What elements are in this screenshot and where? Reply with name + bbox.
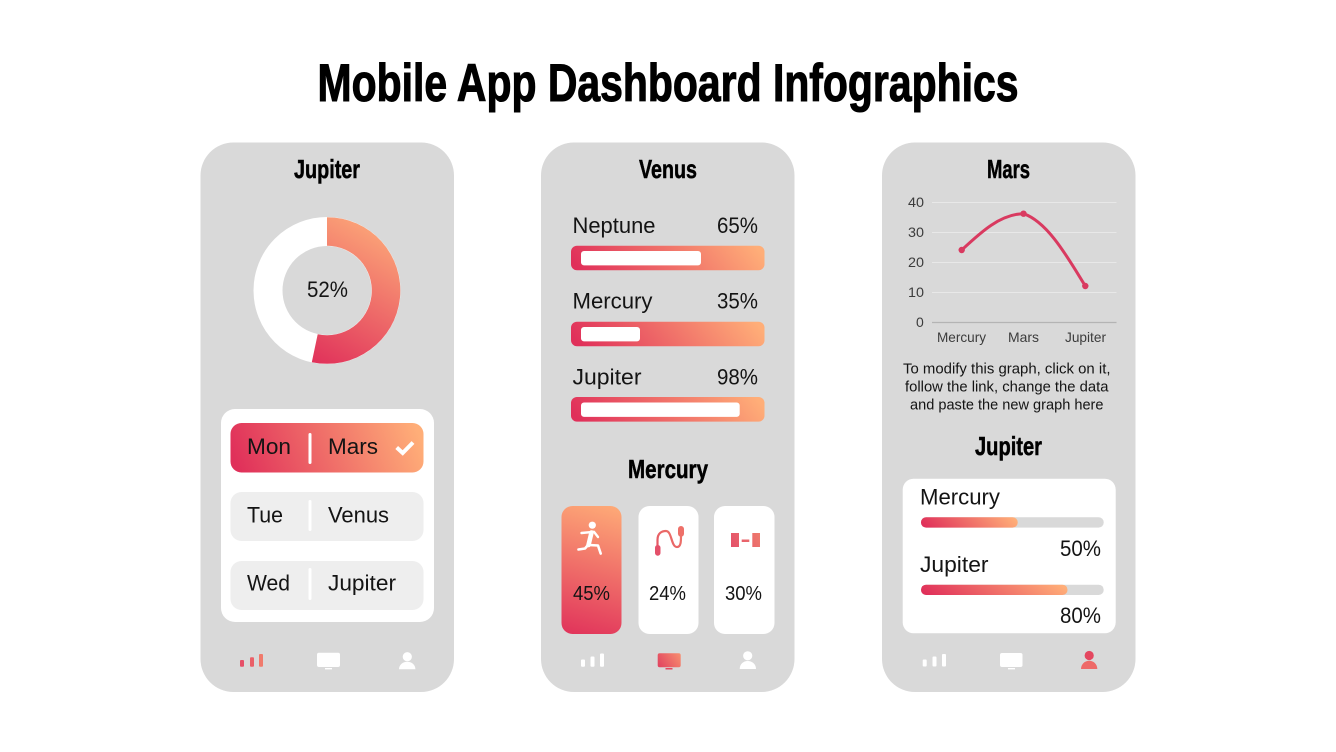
heading: Venus: Venus: [639, 154, 697, 184]
panel: Mars phone: [882, 142, 1136, 692]
icon: runner: [578, 522, 601, 554]
progress: Neptune 65%: Neptune: [572, 213, 656, 238]
heading: Jupiter: Jupiter: [294, 154, 360, 184]
heading: Mercury: Mercury: [628, 454, 708, 484]
row: Tue Venus: Tue: [247, 502, 283, 528]
progress: Mercury 50%: Mercury: [920, 484, 1001, 510]
chart note: To modify this graph, click on it,: [903, 362, 1110, 378]
line chart: Jupiter: [1065, 329, 1106, 345]
icon: dumbbell: [731, 533, 760, 547]
row: Mon Mars selected: Mon: [247, 434, 291, 459]
heading: Mars: Mars: [987, 154, 1030, 184]
schedule card: [221, 409, 434, 622]
icon: jump rope: [655, 526, 684, 556]
chart note: [903, 362, 1110, 414]
line chart: 20: [908, 254, 924, 270]
line chart: 40: [908, 194, 924, 210]
donut chart: 52%: [268, 217, 400, 364]
progress: Mercury 50%: 50%: [1060, 536, 1101, 561]
icon: monitor active: [658, 653, 681, 670]
row: Tue Venus: Venus: [328, 502, 389, 528]
line chart: 10: [908, 284, 924, 300]
icon: bars active: [240, 654, 263, 667]
icon: bars: [923, 654, 946, 666]
donut chart: 52%: 52%: [307, 277, 348, 302]
stat card: run 45%: [562, 506, 622, 634]
progress: Jupiter 80%: [920, 552, 1104, 628]
progress: Jupiter 80%: Jupiter: [920, 552, 989, 577]
row: Mon Mars selected: Mars: [328, 434, 378, 459]
progress card: [903, 479, 1116, 633]
chart note: and paste the new graph here: [910, 398, 1104, 414]
row: Wed Jupiter: [230, 561, 424, 610]
row: Wed Jupiter: Wed: [247, 570, 290, 596]
stat card: rope 24%: [638, 506, 698, 634]
panel: Venus phone: [541, 142, 794, 692]
icon: person: [740, 651, 756, 669]
icon: person active: [1081, 651, 1097, 669]
progress: Neptune 65%: [571, 213, 764, 270]
progress: Mercury 50%: [920, 484, 1104, 561]
progress: Jupiter 98%: [571, 364, 764, 422]
stat card: run 45%: 45%: [573, 583, 610, 605]
progress: Mercury 35%: 35%: [717, 288, 758, 314]
icon: monitor: [317, 653, 340, 669]
row: Mon Mars selected: [230, 423, 424, 472]
progress: Jupiter 98%: 98%: [717, 364, 758, 390]
progress: Jupiter 80%: 80%: [1060, 603, 1101, 628]
panel: Jupiter phone: [200, 142, 454, 692]
title: Mobile App Dashboard Infographics: [318, 54, 1018, 113]
icon: monitor: [1000, 653, 1022, 669]
progress: Neptune 65%: 65%: [717, 213, 758, 238]
line chart: Mercury: [937, 329, 986, 345]
row: Wed Jupiter: Jupiter: [328, 570, 396, 596]
chart note: follow the link, change the data: [905, 380, 1109, 396]
icon: person: [399, 652, 415, 669]
icon: bars: [581, 654, 604, 667]
line chart: [908, 194, 1116, 345]
line chart: 0: [916, 314, 924, 330]
progress: Mercury 35%: [571, 288, 764, 346]
stat card: weights 30%: 30%: [725, 583, 762, 605]
row: Tue Venus: [230, 492, 424, 541]
heading: Jupiter: Jupiter: [975, 431, 1042, 461]
stat card: weights 30%: [714, 506, 774, 634]
line chart: Mars: [1008, 329, 1039, 345]
line chart: 30: [908, 224, 924, 240]
progress: Jupiter 98%: Jupiter: [572, 364, 642, 390]
progress: Mercury 35%: Mercury: [572, 288, 653, 314]
stat card: rope 24%: 24%: [649, 583, 686, 605]
